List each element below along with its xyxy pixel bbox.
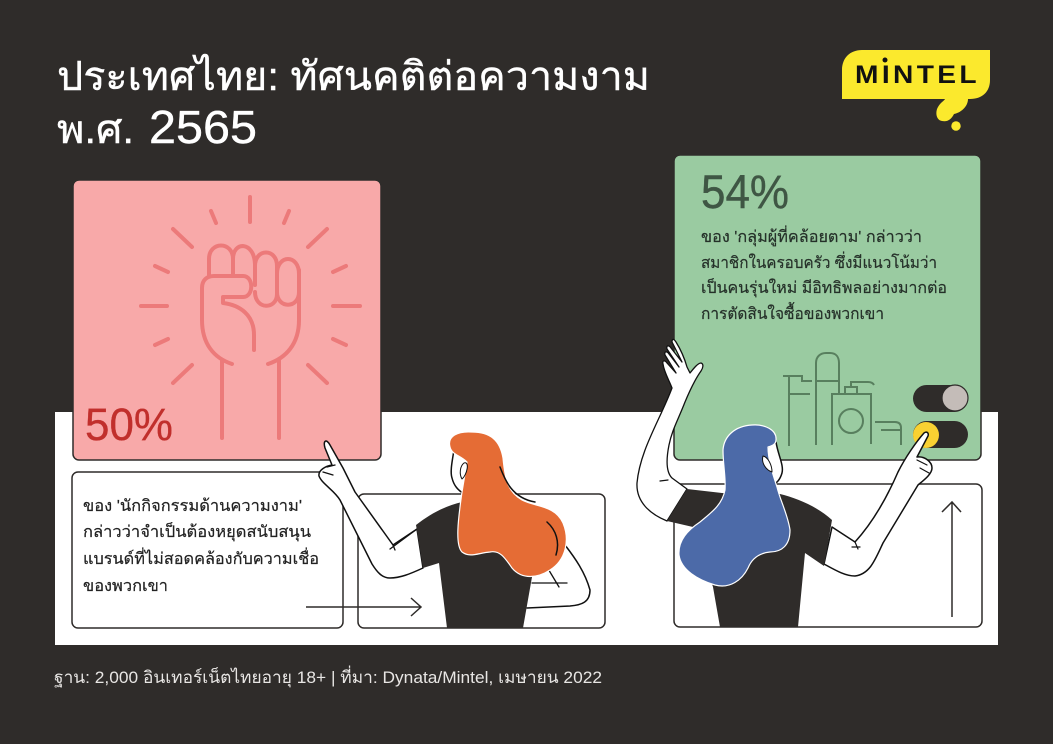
arrow: up: [942, 502, 961, 617]
text: 50 percent description: กล่าวว่าจำเป็นต้องหยุดสนับสนุน: [83, 521, 311, 542]
stat: 50 percent: 50%: [85, 399, 173, 450]
toggle: off: [913, 385, 968, 412]
logo: Mintel: MINTEL: [855, 61, 980, 89]
text: 54 percent description: [701, 225, 947, 323]
figure: woman with orange hair: [319, 432, 590, 628]
face: [451, 450, 475, 494]
text: 54 percent description: เป็นคนรุ่นใหม่ มีอิทธิพลอย่างมากต่อ: [701, 277, 947, 298]
raised left arm: [637, 339, 703, 521]
text: 54 percent description: การตัดสินใจซื้อของพวกเขา: [701, 302, 884, 323]
ear: [763, 456, 772, 472]
toggle: on: [913, 421, 968, 448]
left arm pointing at pink card: [319, 441, 423, 578]
panel: empty box right: [674, 484, 982, 627]
stat: 54 percent: 54%: [701, 165, 789, 218]
logo: Mintel: [842, 50, 990, 131]
raised right arm pointing at toggle: [824, 432, 932, 576]
blue hair: [679, 425, 790, 586]
arrow: right: [306, 598, 421, 616]
ear: [460, 463, 467, 479]
text: 50 percent description: ของ 'นักกิจกรรมด้านความงาม': [83, 497, 302, 515]
icon: beauty bottles: [783, 353, 901, 446]
panel: green 54 percent card: [674, 155, 981, 460]
panel: pink 50 percent card: [73, 180, 381, 460]
icon: raised fist: [141, 197, 360, 438]
sleeve and finger details: [323, 465, 567, 587]
title: 2565: [149, 101, 257, 153]
figure: woman with blue hair: [637, 339, 932, 627]
panel: text box left: [72, 472, 343, 628]
text: 50 percent description: แบรนด์ที่ไม่สอดคล้องกับความเชื่อ: [83, 547, 319, 568]
orange hair: [450, 432, 566, 576]
text: 54 percent description: สมาชิกในครอบครัว ซึ่งมีแนวโน้มว่า: [701, 251, 937, 272]
title: [57, 54, 650, 153]
right arm: [527, 545, 590, 608]
text: 54 percent description: ของ 'กลุ่มผู้ที่คล้อยตาม' กล่าวว่า: [701, 225, 922, 247]
title: ประเทศไทย: ทัศนคติต่อความงาม: [57, 54, 650, 99]
face: [762, 442, 782, 484]
shirt: [416, 502, 532, 628]
panel: empty box middle: [358, 494, 605, 628]
text: 50 percent description: ของพวกเขา: [83, 578, 168, 595]
shirt: [667, 489, 832, 627]
arm and finger details: [660, 460, 929, 549]
hair strands: [500, 467, 558, 555]
title: พ.ศ.: [57, 108, 134, 152]
text: 50 percent description: [83, 497, 319, 595]
footer source note: ฐาน: 2,000 อินเทอร์เน็ตไทยอายุ 18+ | ที่มา: Dynata/Mintel, เมษายน 2022: [54, 665, 602, 688]
